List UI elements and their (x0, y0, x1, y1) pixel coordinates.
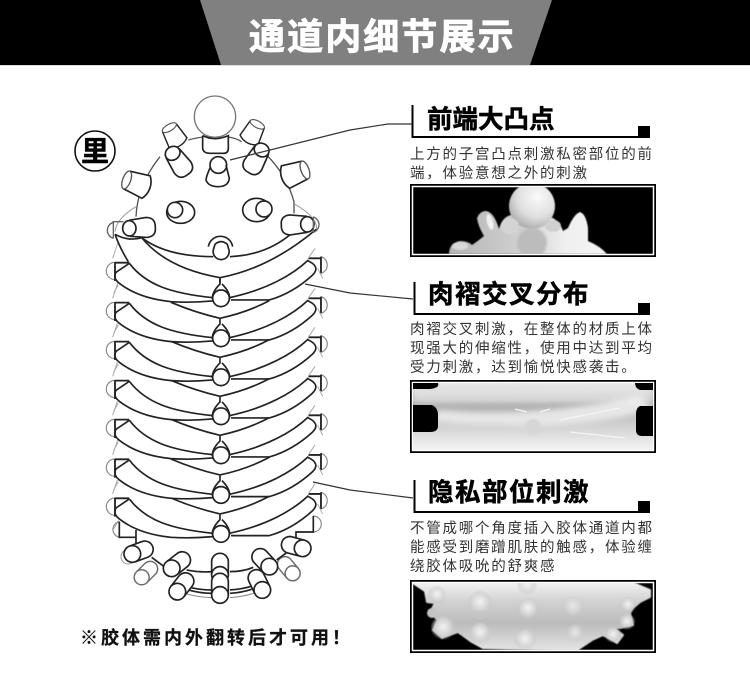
badge: 里 (75, 131, 115, 171)
heading: 隐私部位刺激 (428, 478, 590, 507)
panel: private area (410, 478, 655, 652)
description: 端，体验意想之外的刺激 (410, 164, 589, 182)
description: 肉褶交叉刺激，在整体的材质上体 (410, 320, 654, 338)
description: 受力刺激，达到愉悦快感袭击。 (410, 359, 638, 376)
heading: 肉褶交叉分布 (428, 281, 590, 309)
marker square (638, 126, 650, 137)
description: 不管成哪个角度插入胶体通道内都 (410, 520, 654, 537)
description: 能感受到磨蹭肌肤的触感，体验缠 (410, 538, 654, 556)
heading bracket (414, 282, 650, 314)
footnote: ※胶体需内外翻转后才可用！ (80, 627, 353, 648)
callout line: ribs (305, 284, 413, 299)
heading bracket (414, 480, 650, 512)
header trapezoid (200, 0, 552, 65)
heading: 前端大凸点 (427, 106, 555, 134)
description: 现强大的伸缩性，使用中达到平均 (410, 340, 654, 357)
title: 通道内细节展示 (249, 16, 516, 57)
photo: studded surface (411, 575, 655, 652)
photo: ribs (411, 381, 655, 452)
diagram: channel interior line drawing (106, 96, 327, 603)
panel: front bump (410, 105, 655, 258)
callout line: front bump (230, 124, 413, 160)
header band (0, 0, 750, 66)
photo: bump (411, 183, 655, 258)
ribs (106, 243, 327, 542)
description: 绕胶体吸吮的舒爽感 (410, 558, 556, 575)
foot studs (113, 516, 321, 603)
description: 上方的子宫凸点刺激私密部位的前 (410, 146, 654, 163)
badge: 里: 里 (81, 136, 109, 167)
marker square (638, 303, 650, 314)
head dome with studs (107, 96, 319, 283)
heading bracket (412, 105, 650, 137)
marker square (638, 501, 650, 512)
panel: crossed ribs (410, 281, 655, 452)
callout line: private area (313, 482, 413, 498)
